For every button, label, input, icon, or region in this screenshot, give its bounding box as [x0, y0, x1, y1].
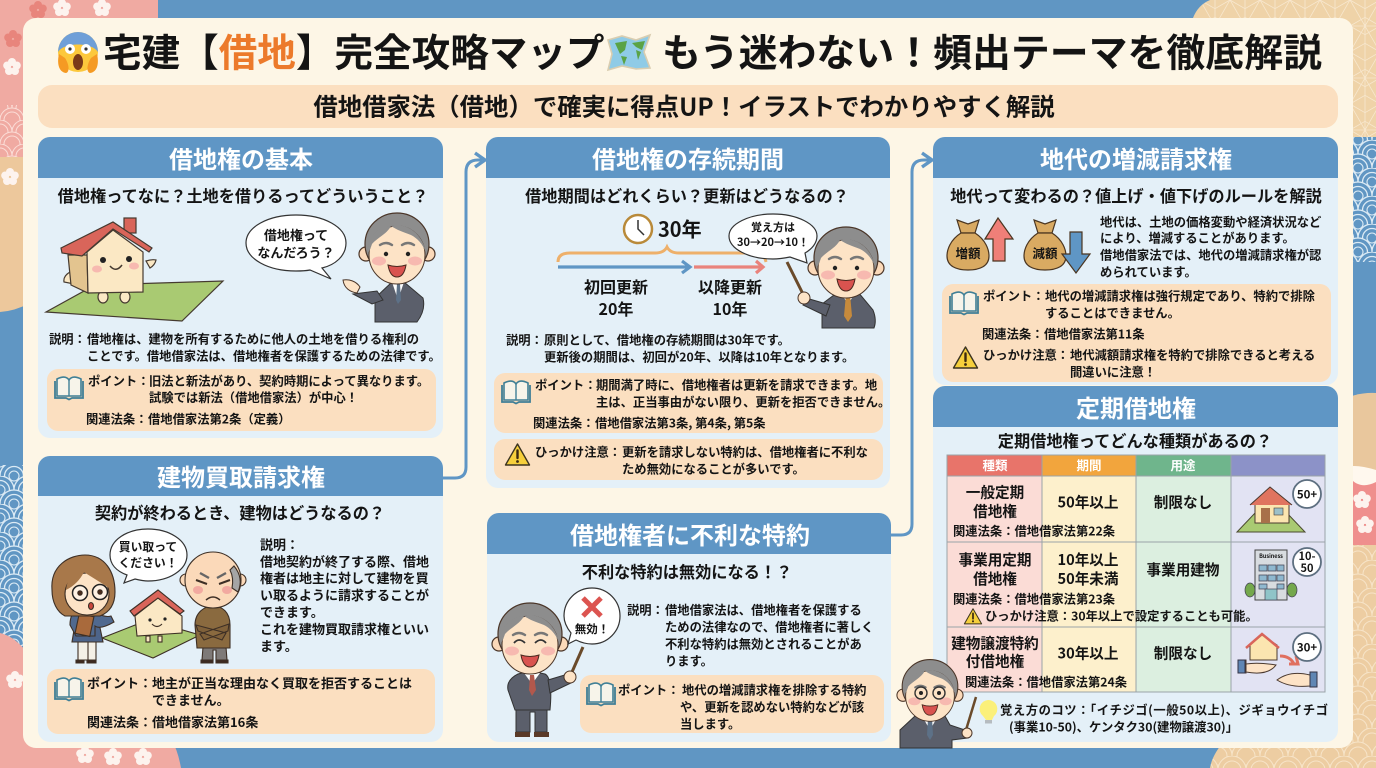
- row: 建物譲渡特約付借地権: 制限なし: [1154, 642, 1212, 664]
- callout: trap warning: ひっかけ注意：: [535, 442, 621, 460]
- row: 建物譲渡特約付借地権: 建物譲渡特約: [951, 632, 1039, 654]
- illustration: house on land: [46, 218, 223, 321]
- icon: scream emoji: [58, 32, 98, 73]
- text: rent explanation: 地代は、土地の価格変動や経済状況など: [1100, 212, 1322, 230]
- callout: point: 関連法条：: [86, 410, 148, 428]
- text: explanation: これを建物買取請求権といい: [260, 619, 429, 638]
- panel: 借地権の基本: 説明：: [49, 330, 86, 348]
- text: rent explanation: [1100, 212, 1322, 280]
- callout: point and warning: 間違いに注意！: [1070, 362, 1156, 380]
- callout: point and warning: 借地借家法第11条: [1044, 324, 1145, 342]
- callout: point: ポイント：: [88, 372, 150, 390]
- speech bubble: [729, 214, 817, 263]
- panel: 定期借地権: 定期借地権ってどんな種類があるの？: [998, 428, 1272, 452]
- row: 一般定期借地権: 50年以上: [1057, 492, 1119, 512]
- callout: point: 試験では新法（借地借家法）が中心！: [149, 388, 358, 406]
- speech bubble: なんだろう？: [257, 242, 335, 262]
- timeline: 30 years, first 20, later 10: 30年: [658, 214, 702, 242]
- illustration: teacher with glasses: [897, 660, 976, 748]
- speech bubble: [110, 529, 187, 583]
- tip: memory trick: (事業10-50)、ケンタク30(建物譲渡30)」: [1009, 718, 1238, 736]
- row: 事業用定期借地権: 10-: [1298, 548, 1316, 564]
- illustration: man in suit: [343, 213, 435, 322]
- callout: point: [47, 369, 436, 431]
- speech bubble: [246, 215, 346, 279]
- speech bubble: 買い取って: [119, 538, 177, 555]
- row: 事業用定期借地権: 借地権: [973, 568, 1017, 589]
- table: fixed-term leasehold types: 期間: [1076, 455, 1102, 474]
- text: explanation: 権者は地主に対して建物を買: [260, 568, 429, 587]
- callout: point and warning: ひっかけ注意：: [983, 346, 1069, 364]
- panel: 借地権の存続期間: 借地期間はどれくらい？更新はどうなるの？: [525, 183, 849, 207]
- row: 建物譲渡特約付借地権: 30+: [1297, 640, 1317, 656]
- text: explanation: 不利な特約は無効とされることがあ: [665, 634, 862, 652]
- callout: point and warning: [942, 284, 1331, 382]
- callout: point: [494, 373, 890, 433]
- panel: 地代の増減請求権: [933, 137, 1338, 385]
- subtitle bar: 借地借家法（借地）で確実に得点UP！イラストでわかりやすく解説: [313, 88, 1055, 124]
- timeline: 30 years, first 20, later 10: 20年: [599, 296, 633, 320]
- row: 一般定期借地権: 制限なし: [1154, 492, 1212, 512]
- text: explanation: ります。: [665, 652, 713, 670]
- panel: 借地権者に不利な特約: [487, 513, 891, 742]
- row: 建物譲渡特約付借地権: 30年以上: [1057, 642, 1119, 664]
- timeline: 30 years, first 20, later 10: 初回更新: [584, 274, 648, 298]
- callout: point: 借地借家法第16条: [152, 712, 258, 731]
- text: explanation: 借地契約が終了する際、借地: [260, 552, 429, 570]
- panel: 借地権の存続期間: 借地権の存続期間: [592, 140, 784, 175]
- illustration: teacher full body: [492, 603, 583, 737]
- callout: trap warning: ため無効になることが多いです。: [622, 460, 805, 478]
- text: explanation: 借地借家法は、借地権者を保護する: [665, 600, 862, 618]
- row: 一般定期借地権: 借地権: [973, 500, 1017, 522]
- text: explanation: い取るように請求することが: [260, 585, 429, 604]
- callout: trap warning: 更新を請求しない特約は、借地権者に不利な: [622, 442, 868, 460]
- panel: 借地権の存続期間: [486, 137, 890, 488]
- callout: point: 借地借家法第2条（定義）: [148, 410, 291, 428]
- callout: point and warning: 地代の増減請求権は強行規定であり、特約で排除: [1045, 286, 1316, 304]
- title: [58, 22, 1322, 78]
- panel: 建物買取請求権: 契約が終わるとき、建物はどうなるの？: [95, 500, 385, 524]
- callout: point: [580, 675, 884, 733]
- text: explanation: ます。: [260, 636, 298, 655]
- icon: money bag decrease: [1024, 220, 1090, 273]
- row: 事業用定期借地権: Business: [1259, 552, 1283, 560]
- text: explanation: ための法律なので、借地権者に著しく: [665, 618, 874, 636]
- callout: trap warning: [494, 439, 883, 480]
- panel: 借地権の基本: 借地権ってなに？土地を借りるってどういうこと？: [58, 183, 428, 207]
- callout: point: 当します。: [680, 714, 740, 732]
- row: 一般定期借地権: 関連法条：借地借家法第22条: [953, 522, 1115, 540]
- callout: point: [47, 669, 435, 734]
- callout: point: ポイント：: [618, 680, 680, 698]
- icon: money bag increase: 増額: [955, 243, 981, 262]
- tip: memory trick: 覚え方のコツ：「イチジゴ(一般50以上)、ジギョウイチゴ: [1000, 700, 1328, 718]
- row: 事業用定期借地権: 事業用建物: [1147, 559, 1220, 580]
- timeline: 30 years, first 20, later 10: [558, 214, 766, 320]
- callout: point: できません。: [152, 690, 230, 709]
- speech bubble: invalid: 無効！: [575, 621, 609, 637]
- callout: point: ポイント：: [87, 673, 152, 692]
- text: rent explanation: により、増減することがあります。: [1100, 228, 1295, 246]
- callout: point and warning: 関連法条：: [982, 324, 1044, 342]
- icon: money bag increase: [947, 218, 1013, 270]
- panel: 借地権の存続期間: 原則として、借地権の存続期間は30年です。: [544, 330, 790, 348]
- illustration: tenant, house and landlord: [52, 552, 246, 663]
- woman: [52, 555, 115, 663]
- panel: 借地権の基本: ことです。借地借家法は、借地権者を保護するための法律です。: [87, 346, 441, 364]
- text: explanation: [627, 600, 874, 670]
- speech bubble: 借地権って: [264, 225, 328, 244]
- timeline: 30 years, first 20, later 10: 10年: [713, 296, 747, 320]
- panel: 定期借地権: [897, 386, 1338, 748]
- callout: point: 関連法条：: [533, 414, 594, 432]
- panel: 定期借地権: 定期借地権: [1076, 389, 1196, 424]
- row: 事業用定期借地権: 50: [1301, 560, 1313, 576]
- tip: memory trick: [980, 700, 1328, 736]
- title: 宅建【借地】完全攻略マップ: [103, 22, 605, 78]
- icon: world map emoji: [608, 35, 650, 70]
- panel: 地代の増減請求権: 地代の増減請求権: [1040, 140, 1232, 175]
- panel: 借地権者に不利な特約: 借地権者に不利な特約: [570, 516, 810, 551]
- text: explanation: できます。: [260, 602, 324, 621]
- callout: point: 地主が正当な理由なく買取を拒否することは: [152, 673, 412, 692]
- callout: point: 借地借家法第3条, 第4条, 第5条: [595, 414, 766, 432]
- row: 一般定期借地権: 一般定期: [966, 482, 1024, 502]
- row: 事業用定期借地権: 50年未満: [1057, 568, 1119, 589]
- icon: money bag decrease: 減額: [1032, 243, 1058, 262]
- row: 事業用定期借地権: [953, 548, 1321, 624]
- old man: [180, 552, 246, 663]
- panel: 借地権の基本: 借地権の基本: [169, 140, 313, 175]
- panel: 建物買取請求権: [38, 456, 443, 742]
- callout: point: 主は、正当事由がない限り、更新を拒否できません。: [596, 392, 890, 410]
- text: rent explanation: められています。: [1100, 262, 1197, 280]
- callout: point and warning: することはできません。: [1045, 304, 1180, 322]
- panel: 地代の増減請求権: 地代って変わるの？値上げ・値下げのルールを解説: [950, 183, 1322, 207]
- row: 建物譲渡特約付借地権: [951, 632, 1321, 690]
- row: 事業用定期借地権: 関連法条：借地借家法第23条: [953, 590, 1115, 608]
- row: 建物譲渡特約付借地権: 関連法条：借地借家法第24条: [965, 672, 1127, 690]
- panel: 借地権者に不利な特約: 不利な特約は無効になる！？: [582, 559, 792, 583]
- row: 事業用定期借地権: 事業用定期: [959, 549, 1031, 570]
- callout: point and warning: ポイント：: [983, 286, 1044, 304]
- panel: 借地権の存続期間: 更新後の期間は、初回が20年、以降は10年となります。: [544, 348, 854, 366]
- panel: 建物買取請求権: 建物買取請求権: [157, 458, 325, 493]
- speech bubble: ください！: [118, 554, 178, 571]
- illustration: teacher with pointer: [787, 227, 884, 328]
- speech bubble: 覚え方は: [751, 219, 795, 235]
- table: fixed-term leasehold types: 種類: [982, 455, 1008, 474]
- row: 一般定期借地権: [953, 480, 1321, 540]
- panel: 借地権の存続期間: 説明：: [506, 330, 543, 348]
- callout: point: 地代の増減請求権を排除する特約: [682, 680, 866, 698]
- text: explanation: 説明：: [260, 534, 299, 554]
- row: 事業用定期借地権: 10年以上: [1057, 549, 1119, 570]
- table: fixed-term leasehold types: [947, 455, 1325, 692]
- arrow: panel 2 to panel 3: [443, 153, 485, 478]
- timeline: 30 years, first 20, later 10: 以降更新: [698, 274, 762, 298]
- text: rent explanation: 借地借家法では、地代の増減請求権が認: [1100, 246, 1322, 264]
- row: 事業用定期借地権: ひっかけ注意：30年以上で設定することも可能。: [985, 606, 1258, 624]
- panel: 借地権の基本: 借地権は、建物を所有するために他人の土地を借りる権利の: [87, 330, 419, 348]
- text: explanation: [260, 534, 429, 655]
- table: fixed-term leasehold types: 用途: [1170, 455, 1196, 474]
- text: explanation: 説明：: [627, 600, 664, 618]
- row: 一般定期借地権: 50+: [1297, 486, 1317, 502]
- subtitle bar: [38, 85, 1338, 128]
- panel: 借地権の基本: [38, 137, 443, 438]
- callout: point: や、更新を認めない特約などが該: [680, 698, 865, 716]
- arrow: panel 4 to panel 5: [891, 153, 932, 535]
- speech bubble: invalid: [564, 588, 620, 644]
- callout: point: 関連法条：: [87, 712, 152, 731]
- callout: point: ポイント：: [535, 376, 596, 394]
- callout: point and warning: 地代減額請求権を特約で排除できると考える: [1070, 346, 1315, 364]
- callout: point: 旧法と新法があり、契約時期によって異なります。: [149, 372, 429, 390]
- callout: point: 期間満了時に、借地権者は更新を請求できます。地: [596, 376, 878, 394]
- title: もう迷わない！頻出テーマを徹底解説: [662, 22, 1322, 78]
- row: 建物譲渡特約付借地権: 付借地権: [966, 650, 1025, 672]
- speech bubble: 30→20→10！: [737, 234, 809, 250]
